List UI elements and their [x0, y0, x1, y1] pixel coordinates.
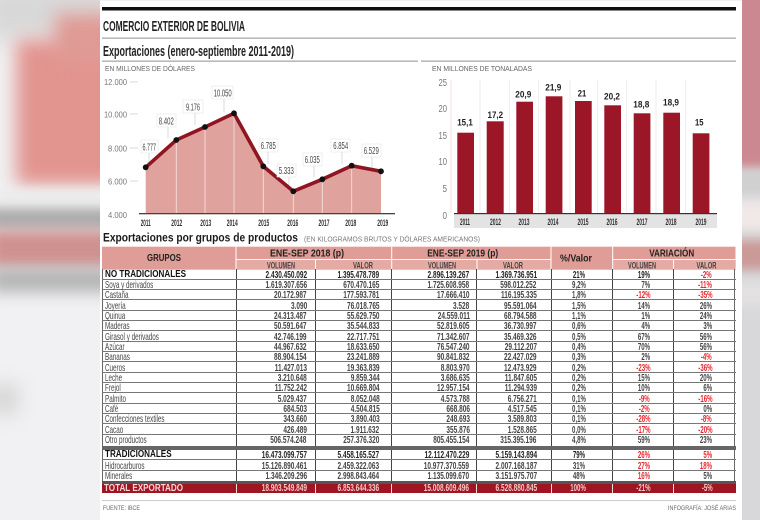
value labels: 10.050: [214, 88, 232, 99]
row: quinua: 24%: [700, 310, 712, 322]
x axis years: 2014: [227, 218, 238, 228]
row: girasol: 35.469.326: [504, 331, 537, 343]
source: FUENTE: IBCE: [103, 505, 141, 512]
table body: [102, 269, 736, 494]
row: otro productos: 506.574.248: [271, 434, 307, 446]
table header: VOLUMEN: [428, 260, 456, 271]
table header: VALOR: [696, 260, 717, 271]
credit: INFOGRAFÍA: JOSÉ ARIAS: [668, 503, 737, 512]
row: minerales: 3.151.975.707: [495, 470, 537, 482]
row: castaña: 17.666.410: [437, 289, 469, 301]
row: total exportado: -5%: [702, 482, 713, 494]
row: cueros: Cueros: [105, 362, 125, 374]
unit label: EN MILLONES DE TONALADAS: [432, 64, 532, 73]
row: confecciones textiles: -8%: [701, 413, 712, 425]
row: cacao: 1.528.865: [508, 424, 537, 436]
row: hidrocarburos: 15.126.890.461: [262, 460, 307, 472]
row: tradicionales: 79%: [573, 449, 585, 461]
axis: [139, 213, 395, 214]
row: leche: 11.847.605: [505, 372, 537, 384]
row: bananas: 2%: [641, 351, 650, 363]
row: no tradicionales: 2.430.450.092: [265, 269, 307, 281]
row: quinua: 68.794.588: [504, 310, 537, 322]
row: palmito: Palmito: [105, 393, 126, 405]
row: bananas: -4%: [701, 351, 712, 363]
row: castaña: 116.195.335: [501, 289, 537, 301]
row: cacao: 0,0%: [572, 424, 585, 436]
row: no tradicionales: 19%: [638, 269, 650, 281]
table header: %/Valor: [560, 254, 592, 264]
row: quinua: 24.559.011: [437, 310, 469, 322]
row: maderas: 4%: [641, 320, 650, 332]
x axis years: 2016: [606, 217, 618, 227]
row: bananas: 23.241.889: [347, 351, 379, 363]
leader lines: [149, 99, 372, 189]
row: leche: 3.686.635: [441, 372, 469, 384]
x axis years: 2011: [141, 218, 151, 228]
axis: [454, 213, 717, 214]
bar value labels: 18,9: [663, 98, 679, 108]
x axis years: 2018: [666, 217, 676, 227]
row: azúcar: 0,4%: [572, 341, 585, 353]
row: maderas: [102, 321, 736, 331]
row: girasol: [102, 331, 736, 342]
row: tradicionales: 16.473.099.757: [262, 449, 307, 461]
y axis labels: 12.000: [104, 77, 127, 87]
row: joyería: [102, 300, 736, 311]
row: soya: 1.619.307.656: [265, 279, 307, 291]
table header: ENE-SEP 2018 (p): [270, 248, 344, 260]
table header: GRUPOS: [147, 253, 181, 264]
row: quinua: [102, 311, 736, 321]
x axis years: 2016: [287, 218, 298, 228]
row: otro productos: 805.455.154: [433, 434, 469, 446]
value labels: 9.176: [186, 102, 200, 113]
row: girasol: Girasol y derivados: [105, 331, 159, 343]
row: hidrocarburos: 18%: [700, 460, 712, 472]
row: hidrocarburos: Hidrocarburos: [105, 460, 145, 472]
row: café: 4.517.545: [508, 403, 537, 415]
row: soya: [102, 280, 736, 290]
value labels: 6.785: [261, 141, 276, 152]
row: otro productos: 4,8%: [572, 434, 585, 446]
row: hidrocarburos: 10.977.370.559: [424, 460, 469, 472]
row: maderas: 36.730.997: [504, 320, 537, 332]
row: quinua: Quinua: [105, 310, 125, 322]
row: castaña: [102, 290, 736, 300]
bars: [457, 96, 709, 213]
row: palmito: 4.573.788: [441, 393, 469, 405]
bar value labels: 20,2: [604, 92, 620, 102]
x axis years: 2017: [636, 217, 648, 227]
x axis years: 2014: [548, 217, 558, 227]
row: confecciones textiles: 0,1%: [572, 413, 585, 425]
x axis years: 2019: [377, 218, 388, 228]
row: girasol: 71.342.607: [437, 331, 469, 343]
row: tradicionales: 5%: [703, 449, 712, 461]
row: palmito: -9%: [639, 393, 650, 405]
row: frejol: [102, 383, 736, 393]
row: tradicionales: 5.159.143.894: [495, 449, 537, 461]
row: no tradicionales: 1.395.478.789: [338, 269, 379, 281]
blurred photo background: right: [742, 0, 760, 520]
row: tradicionales: 12.112.470.229: [425, 449, 469, 461]
row: otro productos: 59%: [638, 434, 650, 446]
row: palmito: 6.756.271: [508, 393, 537, 405]
row: frejol: 12.957.154: [437, 382, 469, 394]
table header: VARIACIÓN: [649, 246, 694, 260]
row: frejol: 10.669.804: [347, 382, 379, 394]
y axis labels: 8.000: [108, 144, 127, 154]
row: bananas: Bananas: [105, 351, 130, 363]
row: azúcar: 70%: [638, 341, 650, 353]
y axis labels: 0: [442, 211, 447, 222]
row: palmito: 8.052.048: [351, 393, 379, 405]
bar chart: exports in millions of tonnes: [432, 64, 717, 228]
row: confecciones textiles: 343.660: [283, 413, 307, 425]
value labels: 5.333: [279, 166, 294, 177]
row: no tradicionales: -2%: [701, 269, 712, 281]
row: no tradicionales: 2.896.139.267: [428, 269, 469, 281]
row: azúcar: 18.633.650: [347, 341, 379, 353]
row: café: -2%: [639, 403, 650, 415]
row: otro productos: 257.376.320: [343, 434, 379, 446]
row: joyería: 26%: [700, 300, 712, 312]
row: soya: 7%: [641, 279, 650, 291]
row: café: [102, 404, 736, 414]
row: frejol: Frejol: [105, 382, 121, 394]
row: leche: 0,2%: [572, 372, 585, 384]
value labels: 6.035: [305, 155, 320, 166]
row: tradicionales: 26%: [638, 449, 650, 461]
row: castaña: -12%: [636, 289, 650, 301]
bar value labels: 17,2: [488, 110, 503, 121]
row: cueros: 8.803.970: [441, 362, 469, 374]
row: soya: 1.725.608.958: [428, 279, 469, 291]
row: bananas: [102, 352, 736, 362]
y axis labels: [438, 78, 447, 222]
row: girasol: 0,5%: [572, 331, 585, 343]
row: cueros: -36%: [698, 362, 712, 374]
row: palmito: -16%: [698, 393, 712, 405]
row: total exportado: 6.528.880.845: [495, 482, 537, 494]
y axis labels: 4.000: [108, 210, 127, 220]
row: quinua: 24.313.487: [274, 310, 307, 322]
bar value labels: 18,8: [633, 100, 649, 110]
table header: VOLUMEN: [267, 260, 295, 271]
blurred photo background: left: [0, 0, 100, 418]
row: castaña: 20.172.987: [274, 289, 307, 301]
row: total exportado: 6.853.644.336: [338, 482, 379, 494]
row: girasol: 42.746.199: [274, 331, 307, 343]
row: girasol: 56%: [700, 331, 712, 343]
row: azúcar: 44.967.632: [274, 341, 307, 353]
line chart: exports in millions of dollars: [104, 64, 395, 228]
row: café: 4.504.815: [351, 403, 379, 415]
data line: [146, 113, 381, 191]
row: no tradicionales: 21%: [573, 269, 585, 281]
row: joyería: 95.591.064: [504, 300, 537, 312]
bar value labels: 21: [578, 88, 587, 100]
row: no tradicionales: [102, 269, 736, 280]
row: hidrocarburos: [102, 460, 736, 471]
row: castaña: 177.593.781: [343, 289, 379, 301]
y axis labels: 25: [438, 78, 447, 89]
table heading note: (EN KILOGRAMOS BRUTOS Y DÓLARES AMERICANOS): [304, 234, 480, 244]
row: palmito: [102, 393, 736, 404]
data points: [143, 110, 384, 194]
row: café: 684.503: [283, 403, 307, 415]
row: maderas: 3%: [703, 320, 712, 332]
row: cueros: [102, 362, 736, 373]
row: cueros: 11.427.013: [275, 362, 307, 374]
row: frejol: 0,2%: [572, 382, 585, 394]
row: minerales: 1.346.209.296: [265, 470, 307, 482]
row: leche: [102, 373, 736, 383]
y axis labels: [104, 77, 127, 220]
y axis labels: 15: [438, 131, 447, 142]
row: minerales: 16%: [638, 470, 650, 482]
x axis years: 2019: [696, 217, 706, 227]
row: hidrocarburos: 27%: [638, 460, 650, 472]
row: no tradicionales: 1.369.736.951: [495, 269, 537, 281]
row: maderas: 0,6%: [572, 320, 585, 332]
row: bananas: 0,3%: [572, 351, 585, 363]
row: soya: 598.012.252: [501, 279, 537, 291]
row: quinua: 1,1%: [572, 310, 585, 322]
row: bananas: 88.904.154: [274, 351, 307, 363]
table header: [102, 246, 736, 271]
row: minerales: 48%: [573, 470, 585, 482]
row: leche: 15%: [638, 372, 650, 384]
row: otro productos: Otro productos: [105, 434, 147, 446]
row: azúcar: 29.112.207: [505, 341, 537, 353]
row: minerales: 2.998.843.464: [338, 470, 379, 482]
row: maderas: 52.819.605: [437, 320, 469, 332]
row: cueros: 12.473.929: [504, 362, 537, 374]
row: no tradicionales: NO TRADICIONALES: [105, 269, 186, 280]
row: bananas: 90.841.832: [437, 351, 469, 363]
row: cacao: -20%: [698, 424, 712, 436]
row: cacao: 355.876: [446, 424, 469, 436]
row: azúcar: [102, 342, 736, 352]
row: leche: 9.859.344: [351, 372, 379, 384]
row: palmito: 5.029.437: [278, 393, 307, 405]
row: tradicionales: TRADICIONALES: [105, 449, 172, 460]
footer rule: [102, 500, 736, 501]
x axis years: 2015: [258, 218, 269, 228]
x axis years: 2013: [518, 217, 530, 227]
value labels: 8.402: [159, 116, 174, 127]
table header: VOLUMEN: [628, 260, 656, 271]
row: café: 0%: [703, 403, 712, 415]
row: café: Café: [105, 403, 118, 415]
y axis labels: 5: [442, 184, 447, 195]
row: minerales: 5%: [703, 470, 712, 482]
row: tradicionales: 5.458.165.527: [338, 449, 379, 461]
row: tradicionales: [102, 450, 736, 460]
row: bananas: 22.427.029: [504, 351, 537, 363]
row: total exportado: -21%: [636, 482, 650, 494]
x axis years: 2011: [460, 217, 470, 227]
x axis years: 2017: [318, 218, 330, 228]
row: otro productos: 23%: [700, 434, 712, 446]
row: joyería: 3.528: [453, 300, 469, 312]
bar value labels: 21,9: [545, 82, 561, 94]
row: total exportado: 100%: [570, 482, 585, 494]
row: joyería: Joyería: [105, 300, 126, 312]
row: palmito: 0,1%: [572, 393, 585, 405]
row: frejol: 10%: [638, 382, 650, 394]
row: minerales: 1.135.099.670: [428, 470, 469, 482]
row: quinua: 1%: [641, 310, 650, 322]
row: cacao: -17%: [636, 424, 650, 436]
dark band: [102, 481, 736, 484]
x axis years: 2012: [171, 218, 182, 228]
row: castaña: Castaña: [105, 289, 128, 301]
row: leche: 20%: [700, 372, 712, 384]
row: café: 0,1%: [572, 403, 585, 415]
table header: VALOR: [503, 260, 523, 271]
row: soya: -11%: [698, 279, 712, 291]
x axis years: 2012: [490, 217, 501, 227]
bar value labels: 15,1: [457, 118, 473, 128]
y axis labels: 6.000: [108, 176, 127, 186]
row: total exportado: 15.008.609.496: [424, 482, 469, 494]
table header: ENE-SEP 2019 (p): [427, 248, 498, 260]
row: confecciones textiles: Confecciones textiles: [105, 413, 165, 425]
row: total exportado: [102, 484, 736, 493]
area under line: [146, 113, 381, 214]
row: cueros: -23%: [636, 362, 650, 374]
row: leche: Leche: [105, 372, 122, 384]
y axis labels: 20: [438, 104, 447, 115]
row: joyería: 76.018.765: [347, 300, 379, 312]
x axis years: 2015: [578, 217, 588, 227]
subtitle: Exportaciones (enero-septiembre 2011-2019): [103, 43, 294, 60]
table header: VALOR: [353, 260, 373, 271]
header rule: [102, 7, 736, 10]
x axis years: 2018: [345, 218, 356, 228]
year strip: [454, 214, 717, 228]
thick separator: [102, 446, 736, 450]
x axis years: [141, 218, 388, 228]
y axis labels: 10.000: [104, 110, 127, 120]
row: azúcar: Azúcar: [105, 341, 125, 353]
row: maderas: Maderas: [105, 320, 130, 332]
row: azúcar: 56%: [700, 341, 712, 353]
row: soya: 670.470.165: [343, 279, 379, 291]
row: confecciones textiles: [102, 414, 736, 424]
row: cacao: 426.489: [283, 424, 307, 436]
row: cacao: Cacao: [105, 424, 123, 436]
row: joyería: 14%: [638, 300, 650, 312]
row: café: 668.806: [446, 403, 469, 415]
row: confecciones textiles: -28%: [636, 413, 650, 425]
bar value labels: 20,9: [515, 90, 531, 100]
row: hidrocarburos: 2.007.168.187: [495, 460, 537, 472]
x axis years: [460, 217, 706, 227]
row: minerales: [102, 470, 735, 482]
row: hidrocarburos: 2.459.322.063: [338, 460, 379, 472]
value labels: 6.854: [333, 141, 348, 152]
row: maderas: 35.544.833: [347, 320, 379, 332]
x axis years: 2013: [200, 218, 211, 228]
row: girasol: 22.717.751: [347, 331, 379, 343]
row: cacao: 1.911.632: [351, 424, 379, 436]
row: minerales: Minerales: [105, 470, 132, 482]
row: otro productos: 315.395.196: [501, 434, 537, 446]
row: quinua: 55.629.750: [347, 310, 379, 322]
value labels: 6.529: [364, 146, 379, 157]
row: joyería: 1,5%: [572, 300, 585, 312]
row: frejol: 6%: [703, 382, 712, 394]
row: total exportado: TOTAL EXPORTADO: [104, 483, 183, 494]
unit label: EN MILLONES DE DÓLARES: [105, 64, 195, 73]
bar value labels: 15: [695, 118, 704, 128]
row: hidrocarburos: 31%: [573, 460, 585, 472]
row: azúcar: 76.547.240: [437, 341, 469, 353]
row: joyería: 3.090: [291, 300, 307, 312]
table heading: Exportaciones por grupos de productos: [103, 230, 298, 244]
title: COMERCIO EXTERIOR DE BOLIVIA: [103, 19, 245, 35]
row: castaña: -35%: [698, 289, 712, 301]
row: total exportado: 18.903.549.849: [262, 482, 307, 494]
row: confecciones textiles: 3.589.803: [508, 413, 537, 425]
row: maderas: 50.591.647: [274, 320, 307, 332]
row: soya: Soya y derivados: [105, 279, 153, 291]
row: frejol: 11.294.939: [505, 382, 537, 394]
value labels: 6.777: [143, 142, 156, 153]
row: frejol: 11.752.242: [275, 382, 307, 394]
row: cueros: 19.363.839: [347, 362, 379, 374]
row: leche: 3.210.648: [278, 372, 307, 384]
row: castaña: 1,8%: [572, 289, 585, 301]
bar value labels: [457, 82, 704, 128]
value labels: [141, 86, 381, 177]
row: cueros: 0,2%: [572, 362, 585, 374]
row: girasol: 67%: [638, 331, 650, 343]
y axis labels: 10: [438, 157, 447, 168]
row: otro productos: [102, 434, 735, 446]
row: soya: 9,2%: [572, 279, 585, 291]
row: cacao: [102, 424, 736, 435]
row: confecciones textiles: 248.693: [446, 413, 469, 425]
row: confecciones textiles: 3.890.403: [351, 413, 379, 425]
